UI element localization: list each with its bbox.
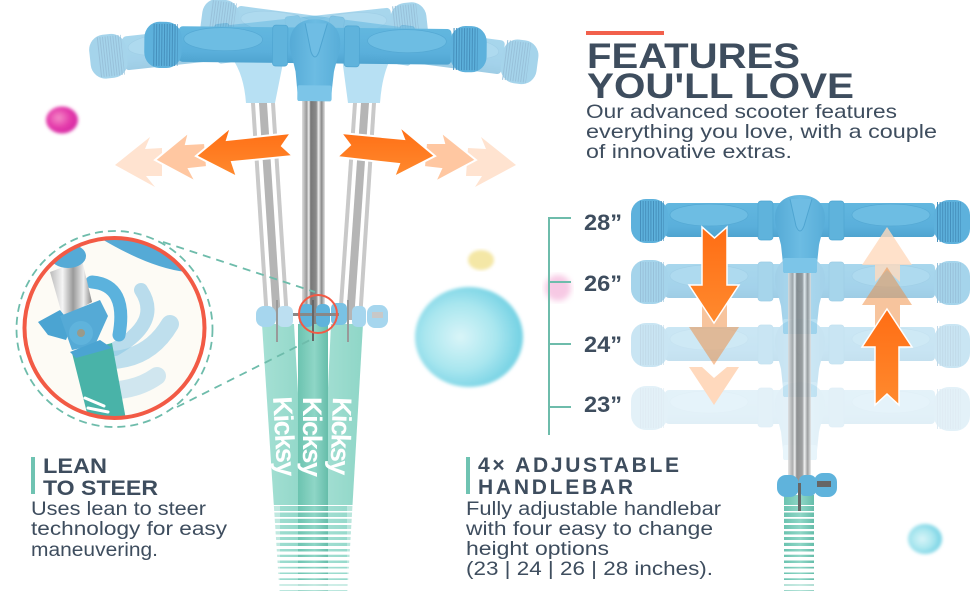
main handlebar (144, 17, 487, 103)
description: technology for easy (31, 519, 228, 540)
decorative ball: yellow (468, 250, 494, 270)
decorative ball: pink (545, 275, 571, 301)
heading: 4× ADJUSTABLE (478, 454, 679, 477)
ghost handlebar leaning left (88, 0, 429, 81)
faded middle arrow left (155, 132, 207, 182)
main down arrow (689, 227, 739, 323)
description: with four easy to change (465, 519, 713, 540)
small red target ring (299, 295, 337, 333)
description (31, 499, 228, 561)
mint tube (780, 495, 824, 600)
red magnifier ring (24, 238, 204, 418)
heading: TO STEER (43, 477, 158, 500)
decorative ball: large teal (415, 287, 523, 387)
accent bar (31, 457, 35, 494)
heading: HANDLEBAR (478, 476, 633, 499)
intro text: Our advanced scooter features (586, 101, 897, 123)
height labels: 26” (584, 271, 622, 296)
height labels: 23” (584, 392, 622, 417)
intro text (586, 101, 937, 163)
faded far arrow right (466, 137, 516, 187)
title (587, 37, 854, 106)
faded down arrow mid (689, 290, 739, 365)
handlebar 26 inch (631, 256, 970, 334)
magnified detail (26, 240, 202, 416)
arrows: height up (862, 227, 912, 405)
description: maneuvering. (31, 540, 158, 561)
heading (43, 455, 158, 500)
decorative ball: small teal (908, 524, 942, 554)
Kicksy logos on tubes (267, 396, 357, 477)
ghost handlebar leaning right (198, 0, 540, 86)
zoom callout: lean mechanism (16, 231, 337, 427)
mint deck tubes (250, 324, 377, 600)
section: lean to steer (31, 455, 228, 561)
decorative ball: magenta (46, 106, 78, 134)
heading accent bar (586, 31, 664, 35)
steering clamps (256, 300, 388, 342)
height labels (584, 210, 622, 417)
faded far arrow left (115, 137, 162, 187)
dashed connector lines (163, 242, 315, 407)
faded middle arrow right (424, 132, 476, 182)
clamp (777, 473, 837, 511)
accent bar (466, 457, 470, 494)
arrows: height down (689, 227, 739, 405)
intro text: of innovative extras. (586, 141, 792, 163)
main orange arrow left (196, 127, 293, 177)
faded up arrow mid (862, 267, 912, 345)
heading (478, 454, 679, 499)
title: FEATURES (587, 37, 800, 76)
arrows: lean right (337, 126, 516, 187)
arrows: lean left (115, 127, 293, 187)
faded down arrow low (689, 367, 739, 405)
Kicksy logos on tubes: Kicksy (297, 397, 327, 477)
height labels: 24” (584, 332, 622, 357)
main up arrow (862, 309, 912, 405)
stem rod (788, 270, 811, 492)
Kicksy logos on tubes: Kicksy (267, 396, 301, 477)
description: height options (466, 539, 609, 560)
main orange arrow right (337, 126, 435, 177)
description: Fully adjustable handlebar (466, 499, 722, 520)
intro text: everything you love, with a couple (586, 121, 937, 143)
stem rods (251, 100, 376, 335)
scooter: lean to steer (88, 0, 540, 600)
height bracket (549, 218, 571, 435)
description: Uses lean to steer (31, 499, 207, 520)
handlebar 24 inch (631, 319, 970, 397)
ghost stems (232, 58, 391, 103)
Kicksy logos on tubes: Kicksy (324, 397, 357, 476)
handlebar 23 inch (631, 382, 970, 460)
description (465, 499, 722, 580)
title: YOU'LL LOVE (587, 67, 854, 106)
handlebar 28 inch (631, 195, 970, 273)
faded up arrow high (862, 227, 912, 282)
heading: LEAN (43, 455, 107, 478)
section: adjustable handlebar (465, 454, 722, 580)
adjustable scooter (631, 195, 970, 600)
height labels: 28” (584, 210, 622, 235)
dashed outer ring (16, 231, 212, 427)
description: (23 | 24 | 26 | 28 inches). (466, 559, 713, 580)
